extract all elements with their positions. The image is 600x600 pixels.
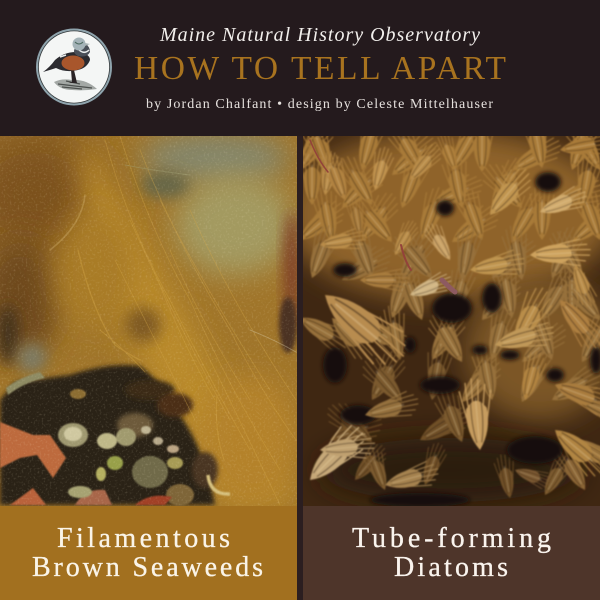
label text: tube-forming: Tube-forming (352, 523, 551, 554)
photo area: periwinkle shells (58, 389, 230, 498)
photo: tube-forming diatoms (303, 136, 600, 506)
label text: diatoms: Diatoms (394, 552, 508, 583)
label panel: tube-forming diatoms (303, 506, 600, 600)
icon: duck ground (54, 79, 97, 90)
photo area: reddish stems (310, 140, 455, 292)
heading: how to tell apart: HOW TO TELL APART (134, 50, 506, 87)
photo area: seabed with dark rock (0, 305, 218, 506)
credit line: by Jordan Chalfant • design by Celeste Mittelhauser (146, 97, 493, 112)
icon: duck legs (69, 70, 77, 83)
label text: filamentous: Filamentous (57, 523, 230, 554)
icon: duck ground shading (58, 81, 92, 89)
logo: harlequin duck medallion (36, 28, 112, 106)
icon: duck bill (85, 43, 90, 46)
photo: filamentous brown seaweeds (0, 136, 297, 506)
photo area: orange encrusting algae (0, 422, 172, 505)
icon: duck white breast band (60, 49, 89, 57)
photo area: tonal base (285, 130, 600, 502)
icon: duck face mark (75, 42, 83, 44)
photo area: seaweed filaments (50, 136, 296, 505)
photo area: floating particles (0, 136, 297, 506)
photo area: dense fur, middle layer (294, 222, 600, 500)
photo area: soft background colors (0, 125, 300, 505)
icon: duck neck (74, 44, 90, 56)
photo area: feathery diatom tufts, front layer (299, 131, 600, 497)
icon: duck head (72, 38, 86, 50)
heading: observatory name: Maine Natural History Observatory (159, 24, 480, 46)
photo area: dense fur, back layer (290, 112, 600, 252)
photo area: dark gaps (323, 172, 600, 507)
icon: duck rust belly (62, 56, 84, 70)
label text: brown seaweeds: Brown Seaweeds (32, 552, 263, 583)
vertical divider (297, 136, 303, 600)
icon: duck tail and back (43, 52, 90, 72)
header band (0, 0, 600, 136)
label panel: filamentous brown seaweeds (0, 506, 297, 600)
